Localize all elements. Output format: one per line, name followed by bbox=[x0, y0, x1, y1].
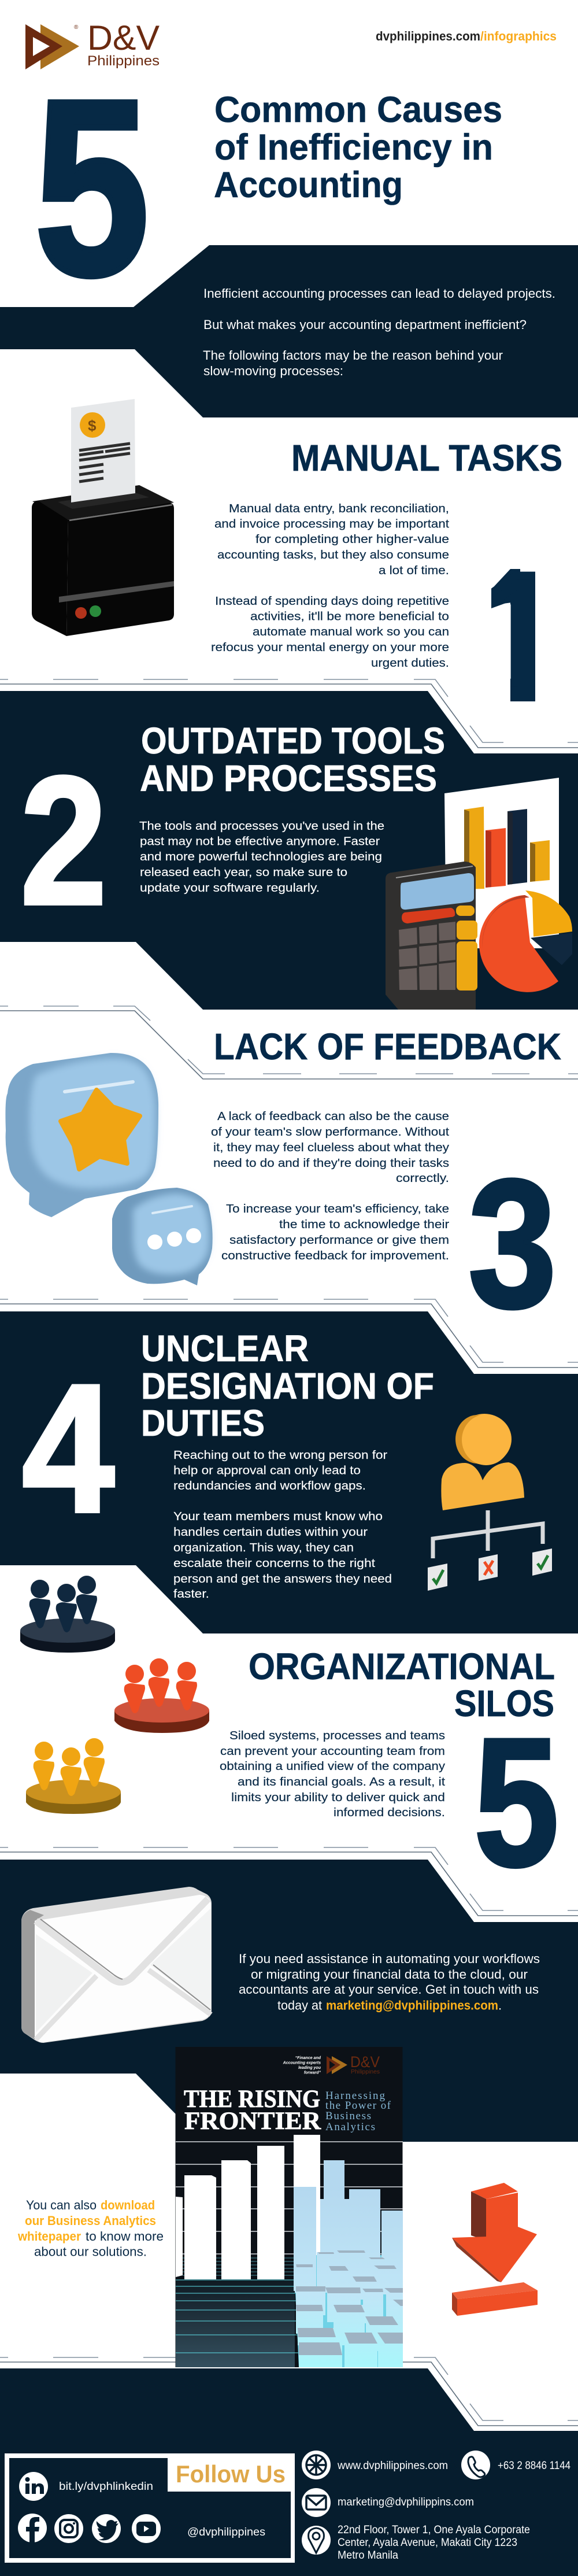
text block: unclear designation: person and get the answers they need bbox=[173, 1572, 392, 1585]
text block: contact us: If you need assistance in automating your workflows bbox=[239, 1952, 540, 1966]
cover: blue city blocks bbox=[294, 2160, 403, 2367]
intro text: Inefficient accounting processes can lead to delayed projects. bbox=[203, 286, 555, 301]
text block: unclear designation: Reaching out to the wrong person for bbox=[173, 1448, 387, 1462]
logo: D&V Philippines bbox=[25, 19, 160, 69]
social handle: @dvphilippines bbox=[187, 2526, 265, 2538]
contact: address: Center, Ayala Avenue, Makati City 1223 bbox=[338, 2537, 517, 2549]
text block: lack of feedback: satisfactory performance or give them bbox=[229, 1233, 449, 1247]
text block: organizational silos: Siloed systems, processes and teams bbox=[229, 1729, 445, 1742]
logo: D&V Philippines: D&V bbox=[87, 19, 160, 57]
cover: logo and tagline: Philippines bbox=[351, 2068, 380, 2075]
text block: manual tasks: refocus your mental energy on your more bbox=[211, 641, 449, 654]
text block: organizational silos: and its financial goals. As a result, it bbox=[238, 1775, 445, 1788]
panel: footer background bbox=[0, 2368, 578, 2576]
text block: manual tasks: for completing other higher-value bbox=[255, 533, 449, 546]
icon: shredder with invoice: $ bbox=[88, 417, 97, 434]
big number four: 4 bbox=[22, 1346, 116, 1550]
text block: organizational silos: can prevent your accounting team from bbox=[220, 1745, 445, 1758]
text block: lack of feedback: of your team's slow performance. Without bbox=[211, 1125, 449, 1139]
cover: logo and tagline: D&V bbox=[350, 2053, 380, 2071]
cover: logo and tagline: leading you bbox=[298, 2066, 321, 2070]
heading: organizational silos: ORGANIZATIONAL bbox=[249, 1646, 555, 1687]
text block: organizational silos: limits your ability to deliver quick and bbox=[231, 1791, 445, 1804]
icon: shredder with invoice bbox=[32, 399, 174, 636]
text block: unclear designation: help or approval can only lead to bbox=[173, 1464, 361, 1477]
text block: manual tasks bbox=[211, 502, 449, 670]
panel: section 2 background bbox=[0, 691, 578, 1010]
cover: logo and tagline: “Finance and bbox=[295, 2056, 321, 2060]
text block: whitepaper download: about our solutions. bbox=[34, 2245, 147, 2259]
text block: manual tasks: automate manual work so you can bbox=[253, 625, 449, 638]
intro text: slow-moving processes: bbox=[203, 364, 343, 378]
text block: outdated tools: update your software regularly. bbox=[140, 881, 320, 895]
panel: intro band bbox=[0, 245, 578, 417]
text block: unclear designation: faster. bbox=[173, 1587, 209, 1601]
text block: outdated tools: released each year, so make sure to bbox=[140, 866, 347, 879]
cover: logo and tagline: forward” bbox=[304, 2071, 321, 2075]
icon: linkedin bbox=[19, 2472, 48, 2501]
text block: contact us: today at bbox=[277, 1998, 322, 2012]
cover: subtitle: the Power of bbox=[325, 2100, 391, 2112]
contact: phone: +63 2 8846 1144 bbox=[498, 2460, 570, 2472]
contact: address: Metro Manila bbox=[338, 2549, 398, 2562]
text block: lack of feedback: correctly. bbox=[396, 1171, 449, 1185]
cover: title: FRONTIER bbox=[184, 2108, 321, 2135]
cover: subtitle: Business bbox=[325, 2110, 371, 2122]
text block: lack of feedback: To increase your team's efficiency, take bbox=[226, 1202, 449, 1215]
text block: outdated tools bbox=[139, 819, 384, 895]
logo: D&V Philippines: ® bbox=[74, 24, 79, 31]
text block: unclear designation: Your team members must know who bbox=[173, 1510, 383, 1523]
contact: address bbox=[302, 2524, 530, 2562]
cover: subtitle bbox=[325, 2090, 391, 2133]
text block: manual tasks: and invoice processing may be important bbox=[214, 517, 449, 531]
text block: manual tasks: Instead of spending days doing repetitive bbox=[215, 594, 449, 608]
heading: outdated tools and processes: AND PROCESSES bbox=[140, 757, 437, 799]
text block: contact us: marketing@dvphilippines.com bbox=[326, 1998, 498, 2012]
text block: whitepaper download: You can also bbox=[26, 2198, 97, 2212]
text block: lack of feedback: need to do and if they're doing their tasks bbox=[213, 1156, 449, 1170]
icon: twitter bbox=[92, 2514, 121, 2543]
cover: subtitle: Analytics bbox=[325, 2121, 375, 2133]
icon: feedback speech bubbles bbox=[5, 1053, 213, 1285]
cover: logo and tagline: Accounting experts bbox=[283, 2061, 321, 2065]
title: of Inefficiency in bbox=[214, 127, 493, 168]
contact: email bbox=[302, 2488, 474, 2517]
icon: navy team on disc bbox=[20, 1576, 115, 1653]
text block: unclear designation bbox=[173, 1448, 392, 1601]
text block: manual tasks: accounting tasks, but they also consume bbox=[217, 548, 449, 561]
icon: instagram bbox=[54, 2514, 83, 2543]
title: Common Causes bbox=[214, 90, 502, 130]
big number two: 2 bbox=[20, 738, 107, 943]
whitepaper cover bbox=[176, 2047, 403, 2367]
big number one bbox=[491, 569, 535, 701]
text block: lack of feedback: the time to acknowledge their bbox=[279, 1218, 449, 1231]
text block: whitepaper download: whitepaper bbox=[17, 2229, 81, 2244]
intro text bbox=[203, 286, 555, 378]
intro text: The following factors may be the reason behind your bbox=[203, 348, 503, 363]
title: Accounting bbox=[214, 165, 403, 205]
logo: D&V Philippines: Philippines bbox=[87, 53, 160, 69]
heading: outdated tools and processes bbox=[140, 720, 445, 799]
contact: website: www.dvphilippines.com bbox=[337, 2460, 448, 2472]
text block: unclear designation: redundancies and workflow gaps. bbox=[173, 1479, 366, 1492]
cover: white bars bbox=[176, 2135, 320, 2279]
linkedin url: bit.ly/dvphlinkedin bbox=[59, 2481, 153, 2493]
text block: lack of feedback bbox=[211, 1110, 450, 1262]
heading: unclear designation of duties: DESIGNATION OF bbox=[141, 1365, 434, 1407]
cover: title: THE RISING bbox=[184, 2086, 320, 2113]
intro text: But what makes your accounting department inefficient? bbox=[203, 317, 527, 332]
text block: whitepaper download: to know more bbox=[86, 2229, 164, 2244]
website url: dvphilippines.com bbox=[376, 29, 480, 43]
contact: address: 22nd Floor, Tower 1, One Ayala Corporate bbox=[338, 2524, 530, 2536]
text block: contact us: or migrating your financial data to the cloud, our bbox=[251, 1967, 528, 1982]
text block: outdated tools: and more powerful technologies are being bbox=[140, 850, 382, 863]
heading: manual tasks: MANUAL TASKS bbox=[291, 437, 562, 479]
icon: youtube bbox=[132, 2514, 161, 2543]
text block: organizational silos: obtaining a unified view of the company bbox=[220, 1760, 446, 1773]
icon: gold team on disc bbox=[26, 1738, 121, 1814]
text block: manual tasks: activities, it'll be more beneficial to bbox=[250, 609, 449, 623]
website url bbox=[376, 29, 557, 43]
panel: contact band bbox=[0, 1860, 578, 2142]
heading: unclear designation of duties: DUTIES bbox=[141, 1402, 265, 1444]
cover: logo and tagline bbox=[283, 2053, 380, 2075]
text block: organizational silos bbox=[220, 1729, 446, 1819]
text block: manual tasks: urgent duties. bbox=[371, 656, 449, 670]
text block: lack of feedback: A lack of feedback can also be the cause bbox=[217, 1110, 449, 1123]
big number three: 3 bbox=[468, 1141, 557, 1346]
text block: outdated tools: The tools and processes you've used in the bbox=[139, 819, 384, 833]
website url: /infographics bbox=[480, 29, 557, 43]
contact: phone bbox=[461, 2451, 570, 2479]
text block: manual tasks: Manual data entry, bank reconciliation, bbox=[229, 502, 449, 515]
heading: unclear designation of duties bbox=[141, 1328, 434, 1444]
text block: contact us: . bbox=[498, 1998, 502, 2012]
heading: organizational silos: SILOS bbox=[454, 1683, 554, 1724]
text block: whitepaper download bbox=[17, 2198, 164, 2259]
text block: lack of feedback: it, they may feel clueless about what they bbox=[213, 1141, 450, 1154]
icon: facebook bbox=[18, 2514, 47, 2542]
panel: section 4 background bbox=[0, 1311, 578, 1633]
icon: envelope bbox=[21, 1887, 212, 2043]
text block: unclear designation: handles certain duties within your bbox=[173, 1525, 368, 1539]
follow us label: Follow Us bbox=[176, 2460, 286, 2488]
text block: outdated tools: past may not be effective anymore. Faster bbox=[140, 835, 380, 848]
icon: red team on disc bbox=[114, 1658, 209, 1733]
contact: email: marketing@dvphilippins.com bbox=[338, 2496, 474, 2508]
cover: title bbox=[184, 2086, 321, 2135]
heading: unclear designation of duties: UNCLEAR bbox=[141, 1328, 309, 1369]
icon: org chart with person bbox=[428, 1414, 552, 1591]
heading: organizational silos bbox=[249, 1646, 555, 1724]
big number five: 5 bbox=[35, 48, 149, 327]
contact: website bbox=[302, 2451, 448, 2479]
text block: whitepaper download: download bbox=[101, 2198, 155, 2212]
title bbox=[214, 90, 502, 205]
text block: whitepaper download: our Business Analytics bbox=[25, 2213, 156, 2228]
panel: follow us box bbox=[5, 2453, 295, 2563]
text block: unclear designation: escalate their concerns to the right bbox=[173, 1557, 375, 1570]
text block: manual tasks: a lot of time. bbox=[379, 564, 449, 577]
text block: unclear designation: organization. This way, they can bbox=[173, 1541, 354, 1554]
cover: subtitle: Harnessing bbox=[325, 2090, 385, 2102]
cover: floor bbox=[176, 2279, 295, 2367]
big number one: 1 bbox=[476, 536, 567, 740]
icon: download arrow bbox=[452, 2183, 538, 2316]
text block: contact us: accountants are at your service. Get in touch with us bbox=[239, 1982, 539, 1997]
icon: charts and calculator bbox=[386, 778, 572, 1010]
big number five, section five: 5 bbox=[474, 1700, 559, 1904]
text block: lack of feedback: constructive feedback for improvement. bbox=[221, 1249, 449, 1262]
heading: outdated tools and processes: OUTDATED TOOLS bbox=[141, 720, 445, 762]
text block: contact us bbox=[239, 1952, 540, 2012]
text block: organizational silos: informed decisions. bbox=[334, 1806, 445, 1819]
